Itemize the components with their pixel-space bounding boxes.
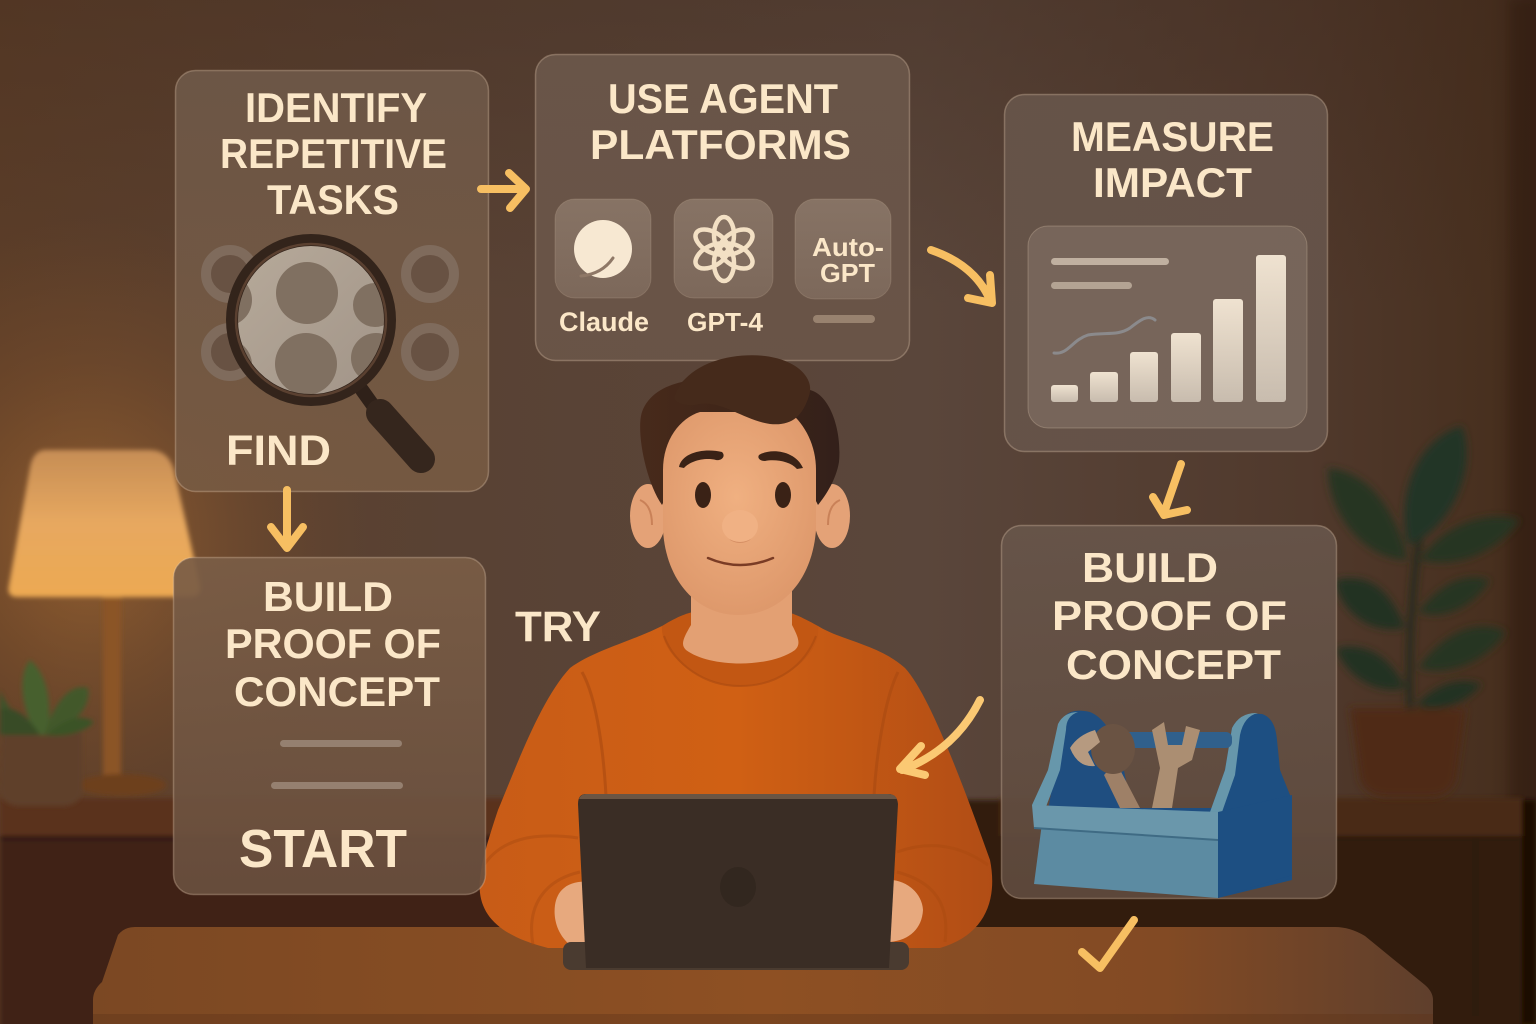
tile: gpt-4: GPT-4: [687, 307, 764, 337]
heading: USE AGENT: [608, 75, 838, 122]
arrow: measure to build: [1153, 464, 1187, 515]
heading: CONCEPT: [1066, 641, 1281, 688]
tile: gpt-4: [674, 199, 773, 337]
heading: TASKS: [267, 176, 399, 223]
hair top: [674, 355, 810, 424]
heading: BUILD: [263, 573, 393, 620]
icon: magnifying glass: [200, 235, 421, 459]
heading: PROOF OF: [225, 620, 441, 667]
panel: measure impact: [1004, 94, 1328, 452]
heading: IMPACT: [1093, 159, 1252, 206]
heading: [1052, 544, 1287, 688]
eyebrows: [679, 451, 803, 469]
right potted plant: [1328, 426, 1520, 797]
heading: CONCEPT: [234, 668, 440, 715]
right sideboard: [960, 798, 1536, 1024]
heading: REPETITIVE: [220, 130, 447, 177]
arrow: find to platforms: [481, 173, 526, 208]
tile: auto-gpt: [795, 199, 891, 323]
ears: [630, 484, 850, 548]
heading: [590, 75, 851, 168]
panel: identify repetitive tasks: [176, 70, 488, 492]
nose: [722, 510, 758, 543]
tile: auto-gpt: GPT: [820, 258, 875, 288]
neck: [683, 585, 798, 664]
person at laptop: [480, 355, 992, 948]
panel: build proof of concept, left: [174, 558, 486, 894]
tile: auto-gpt: Auto-: [812, 232, 884, 262]
heading: PLATFORMS: [590, 121, 851, 168]
label: try: TRY: [515, 603, 601, 651]
heading: [1071, 113, 1274, 206]
heading: IDENTIFY: [245, 84, 427, 131]
heading: [225, 573, 441, 715]
face: [663, 412, 816, 615]
mouth: [708, 558, 773, 565]
left potted plant: [0, 660, 94, 806]
panel: use agent platforms: [536, 54, 910, 360]
sweater: [480, 612, 992, 948]
label: find: FIND: [226, 427, 331, 475]
icon: toolbox: [1032, 711, 1292, 898]
task circles: [206, 250, 454, 376]
heading: MEASURE: [1071, 113, 1274, 160]
table lamp: [8, 450, 200, 796]
arrow: build to person: [900, 700, 980, 775]
left sideboard: [0, 798, 560, 1024]
tile: claude: [555, 199, 651, 337]
eyes: [695, 482, 791, 508]
panel: build proof of concept, right: [1002, 526, 1336, 898]
heading: PROOF OF: [1052, 592, 1287, 639]
heading: BUILD: [1082, 544, 1218, 591]
desk: [93, 927, 1433, 1024]
tile: claude: Claude: [559, 307, 649, 337]
heading: [220, 84, 447, 223]
placeholder lines: [271, 740, 403, 789]
hair back: [640, 360, 839, 505]
arrow: identify to build: [271, 490, 303, 548]
bar chart: [1028, 226, 1307, 428]
hands: [555, 880, 923, 945]
label: start: START: [239, 819, 407, 879]
icon: check mark: [1082, 920, 1134, 968]
laptop: [563, 794, 909, 970]
arrow: platforms to measure: [931, 250, 992, 303]
